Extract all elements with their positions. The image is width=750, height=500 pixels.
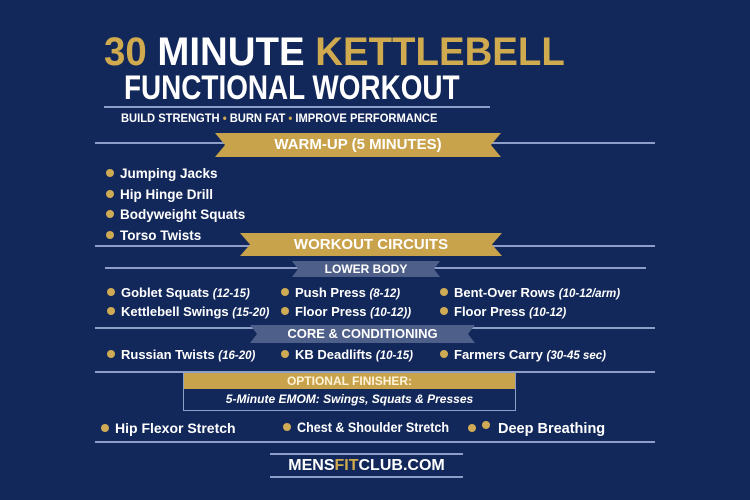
cooldown list: Hip Flexor Stretch — [115, 420, 236, 436]
cooldown list: Chest & Shoulder Stretch — [297, 420, 449, 435]
footer: MENSFITCLUB.COM — [288, 457, 445, 474]
lower body list: Floor Press (10-12) — [454, 304, 566, 319]
footer — [270, 453, 463, 478]
warm-up list: Bodyweight Squats — [120, 207, 245, 222]
warm-up list: Torso Twists — [120, 228, 201, 243]
ribbon: core & conditioning: CORE & CONDITIONING — [287, 326, 438, 341]
subtitle: BUILD STRENGTH • BURN FAT • IMPROVE PERFORMANCE — [121, 111, 437, 125]
lower body list: Bent-Over Rows (10-12/arm) — [454, 285, 620, 300]
core list: Russian Twists (16-20) — [121, 347, 255, 362]
ribbon: warm-up — [215, 133, 501, 157]
lower body list: Floor Press (10-12)) — [295, 304, 411, 319]
lower body list: Goblet Squats (12-15) — [121, 285, 250, 300]
finisher box — [183, 373, 516, 411]
ribbon: workout circuits — [240, 233, 502, 256]
title — [104, 30, 565, 107]
warm-up list — [106, 166, 245, 243]
core list: KB Deadlifts (10-15) — [295, 347, 413, 362]
warm-up list: Jumping Jacks — [120, 166, 218, 181]
title: 30 MINUTE KETTLEBELL — [104, 30, 565, 74]
ribbon: warm-up: WARM-UP (5 MINUTES) — [274, 136, 442, 153]
ribbon: lower body: LOWER BODY — [325, 262, 407, 276]
lower body list — [107, 285, 620, 319]
title: FUNCTIONAL WORKOUT — [124, 69, 460, 107]
core list — [107, 347, 606, 362]
lower body list: Push Press (8-12) — [295, 285, 400, 300]
lower body list: Kettlebell Swings (15-20) — [121, 304, 269, 319]
warm-up list: Hip Hinge Drill — [120, 187, 213, 202]
ribbon: lower body — [292, 261, 440, 277]
finisher box: 5-Minute EMOM: Swings, Squats & Presses — [226, 392, 473, 406]
cooldown list — [101, 420, 605, 437]
ribbon: workout circuits: WORKOUT CIRCUITS — [294, 236, 448, 253]
finisher box: OPTIONAL FINISHER: — [287, 374, 412, 388]
ribbon: core & conditioning — [250, 325, 475, 343]
cooldown list: Deep Breathing — [498, 421, 605, 437]
core list: Farmers Carry (30-45 sec) — [454, 347, 606, 362]
